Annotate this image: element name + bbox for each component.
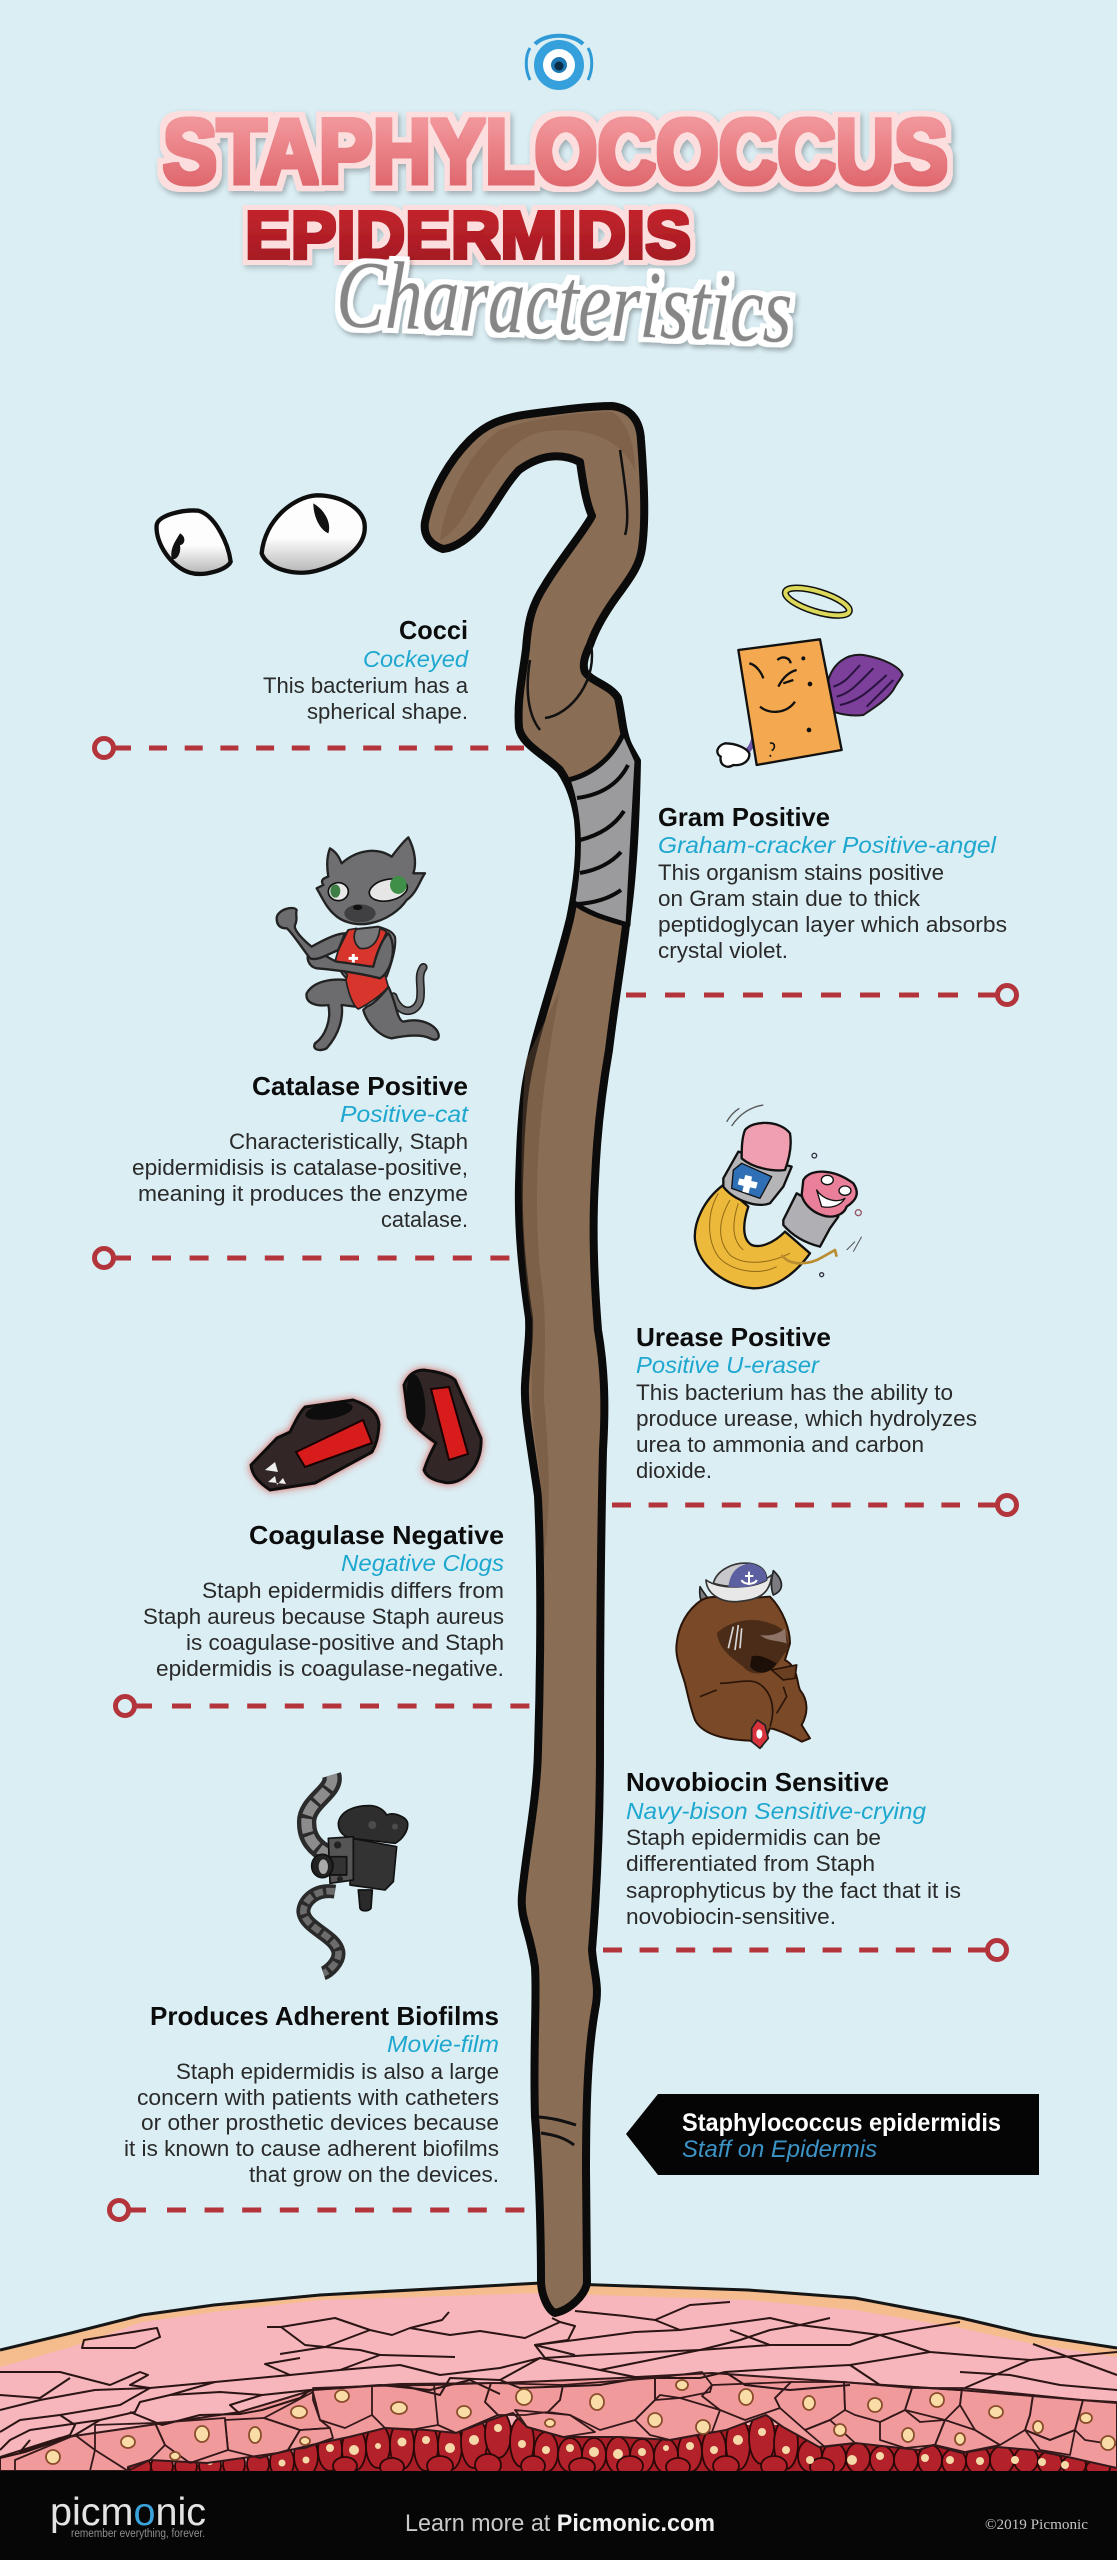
description: crystal violet.: [658, 938, 788, 963]
title: [163, 101, 948, 363]
description: [132, 1129, 468, 1232]
illustration: wooden staff: [425, 406, 644, 2313]
connector: [626, 986, 1016, 1004]
callout: Staphylococcus epidermidis: Staphylococcus epidermidis: [682, 2109, 1001, 2137]
description: Staph epidermidis can be: [626, 1825, 881, 1850]
description: novobiocin-sensitive.: [626, 1904, 836, 1929]
mnemonic: Positive-cat: [340, 1101, 470, 1127]
description: dioxide.: [636, 1458, 712, 1483]
footer logo: remember everything, forever.: [71, 2528, 205, 2540]
title line: Epidermidis: EPIDERMIDIS: [245, 198, 691, 273]
description: [143, 1578, 504, 1681]
panel: Cocci: [94, 495, 525, 758]
connector: [94, 1248, 511, 1268]
mnemonic: Navy-bison Sensitive-crying: [626, 1798, 926, 1824]
heading: Coagulase Negative: [249, 1520, 504, 1550]
panel: Gram Positive: [626, 582, 1016, 1004]
heading: Catalase Positive: [252, 1071, 468, 1101]
description: on Gram stain due to thick: [658, 886, 921, 911]
description: spherical shape.: [307, 699, 468, 724]
description: This organism stains positive: [658, 860, 944, 885]
mnemonic: Positive U-eraser: [636, 1352, 820, 1378]
connector: [110, 2200, 526, 2220]
description: produce urease, which hydrolyzes: [636, 1406, 977, 1431]
description: or other prosthetic devices because: [141, 2110, 499, 2135]
mnemonic: Movie-film: [387, 2031, 499, 2057]
description: that grow on the devices.: [249, 2162, 499, 2187]
icon: U-shaped eraser pencil: [695, 1105, 862, 1288]
mnemonic: Graham-cracker Positive-angel: [658, 832, 997, 858]
panel: Novobiocin Sensitive: [603, 1563, 1006, 1960]
panel: Urease Positive: [612, 1105, 1016, 1514]
mnemonic: Cockeyed: [363, 646, 469, 672]
title line: Staphylococcus: STAPHYLOCOCCUS: [163, 101, 948, 203]
description: saprophyticus by the fact that it is: [626, 1878, 961, 1903]
description: [263, 673, 469, 724]
skin: cell nuclei: [46, 2380, 1115, 2464]
description: catalase.: [381, 1207, 468, 1232]
illustration: skin layers: [0, 2283, 1117, 2479]
panel: Coagulase Negative: [116, 1370, 531, 1716]
skin: surface cracks: [0, 2302, 1117, 2458]
skin: cell layer: [0, 2373, 1117, 2471]
description: [626, 1825, 961, 1929]
icon: graham cracker angel: [717, 582, 903, 767]
connector: [116, 1696, 531, 1716]
icon: negative clogs: [251, 1370, 481, 1490]
description: urea to ammonia and carbon: [636, 1432, 924, 1457]
description: differentiated from Staph: [626, 1851, 875, 1876]
icon: positive cat lifeguard: [277, 837, 439, 1050]
description: is coagulase-positive and Staph: [186, 1630, 504, 1655]
callout: Staphylococcus epidermidis: [626, 2094, 1039, 2175]
copyright: ©2019 Picmonic: [985, 2517, 1088, 2533]
description: Characteristically, Staph: [229, 1129, 468, 1154]
description: epidermidisis is catalase-positive,: [132, 1155, 468, 1180]
description: peptidoglycan layer which absorbs: [658, 912, 1007, 937]
icon: crying navy bison: [676, 1563, 810, 1748]
footer logo: picmonic: [50, 2491, 206, 2534]
description: [636, 1380, 977, 1483]
connector: [612, 1496, 1016, 1514]
title line: Characteristics: Characteristics: [335, 240, 794, 363]
description: This bacterium has the ability to: [636, 1380, 953, 1405]
description: Staph epidermidis is also a large: [176, 2059, 499, 2084]
description: [658, 860, 1007, 963]
description: Staph epidermidis differs from: [202, 1578, 504, 1603]
heading: Gram Positive: [658, 802, 830, 832]
footer bar: [0, 2471, 1117, 2560]
footer link: Learn more at Picmonic.com: [405, 2510, 715, 2537]
staff wrap bandage: [568, 732, 637, 925]
description: [124, 2059, 499, 2187]
icon: Picmonic eye logo: [526, 36, 592, 90]
panel: Catalase Positive: [94, 837, 511, 1268]
connector: [603, 1940, 1006, 1960]
heading: Novobiocin Sensitive: [626, 1767, 889, 1797]
description: This bacterium has a: [263, 673, 469, 698]
description: meaning it produces the enzyme: [138, 1181, 468, 1206]
callout: Staphylococcus epidermidis: Staff on Epidermis: [682, 2136, 877, 2163]
icon: movie camera and film: [303, 1775, 408, 1973]
heading: Cocci: [399, 615, 468, 645]
staff shading: [440, 412, 635, 540]
connector: [94, 738, 525, 758]
skin: red basal cells: [128, 2410, 1117, 2479]
mnemonic: Negative Clogs: [341, 1550, 505, 1576]
icon: cockeyed eyes: [157, 495, 365, 574]
description: Staph aureus because Staph aureus: [143, 1604, 504, 1629]
description: epidermidis is coagulase-negative.: [156, 1656, 504, 1681]
heading: Urease Positive: [636, 1322, 831, 1352]
panel: Produces Adherent Biofilms: [110, 1775, 526, 2220]
skin: cell outlines: [15, 2372, 1117, 2471]
description: concern with patients with catheters: [137, 2085, 499, 2110]
description: it is known to cause adherent biofilms: [124, 2136, 499, 2161]
heading: Produces Adherent Biofilms: [150, 2001, 499, 2031]
staff grip notches: [538, 2117, 576, 2145]
